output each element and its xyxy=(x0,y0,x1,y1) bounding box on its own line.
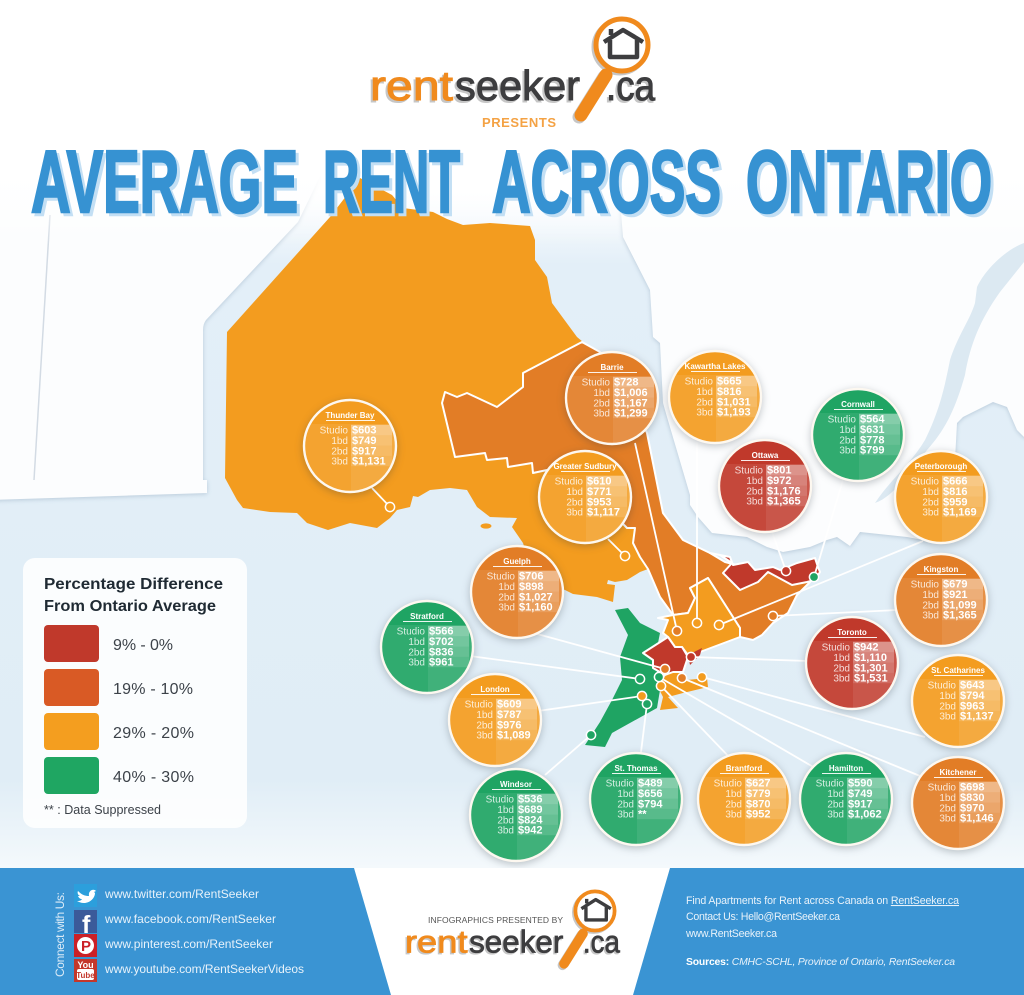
callout: Hamilton: 2bd xyxy=(827,799,844,810)
presents label: PRESENTS xyxy=(482,115,556,130)
callout: Brantford: Brantford xyxy=(726,764,762,773)
callout: Kitchener: $1,146 xyxy=(960,813,994,825)
icon: facebook: f xyxy=(82,911,91,939)
callout: Thunder Bay: Thunder Bay xyxy=(326,411,375,420)
callout: Barrie: 1bd xyxy=(593,388,610,399)
callout: Ottawa: 1bd xyxy=(746,476,763,487)
callout: Peterborough xyxy=(714,451,988,630)
callout: London: $1,089 xyxy=(497,730,531,742)
callout: St. Catharines: 2bd xyxy=(939,701,956,712)
contact text: Sources: CMHC-SCHL, Province of Ontario, RentSeeker.ca xyxy=(686,957,955,968)
callout: Brantford: $870 xyxy=(746,798,770,810)
callout: St. Thomas: 3bd xyxy=(617,810,634,821)
callout: Kingston: $1,099 xyxy=(943,599,977,611)
legend note: ** : Data Suppressed xyxy=(44,803,161,817)
callout: Kitchener: $830 xyxy=(960,792,984,804)
callout: Toronto: 2bd xyxy=(833,663,850,674)
callout: Ottawa: 3bd xyxy=(746,497,763,508)
callout: Kingston: 3bd xyxy=(922,611,939,622)
legend item: 9-0 xyxy=(44,625,173,662)
callout: Cornwall xyxy=(809,389,905,582)
callout: Kawartha Lakes: Kawartha Lakes xyxy=(685,362,746,371)
callout: St. Catharines: 3bd xyxy=(939,712,956,723)
callout: Stratford: $961 xyxy=(429,657,453,669)
callout: Hamilton: $1,062 xyxy=(848,809,882,821)
region: northern Ontario xyxy=(225,178,648,602)
footer: right panel xyxy=(633,868,1024,995)
callout: Hamilton: 1bd xyxy=(827,789,844,800)
callout: Kawartha Lakes: Studio xyxy=(685,377,713,388)
callout: Greater Sudbury: $610 xyxy=(587,476,611,488)
callout: Guelph: $706 xyxy=(519,571,543,583)
legend item: 29-20 xyxy=(44,713,194,750)
icon: pinterest: P xyxy=(81,938,91,955)
title: AVERAGE xyxy=(31,132,298,231)
callout: St. Thomas: $489 xyxy=(638,778,662,790)
title: RENT xyxy=(323,132,460,231)
callout: Kawartha Lakes xyxy=(669,351,762,628)
callout: Hamilton xyxy=(654,672,893,847)
callout: Cornwall: $778 xyxy=(860,434,884,446)
callout: Cornwall: 2bd xyxy=(839,435,856,446)
logo: top RentSeeker xyxy=(370,19,656,115)
callout: Guelph: $1,027 xyxy=(519,591,553,603)
callout: Thunder Bay: 1bd xyxy=(331,436,348,447)
callout: London xyxy=(449,674,647,768)
callout: St. Catharines: 1bd xyxy=(939,691,956,702)
logo: top RentSeeker: .ca xyxy=(606,62,656,109)
callout: Windsor xyxy=(470,730,596,863)
callout: Hamilton: $590 xyxy=(848,778,872,790)
callout: Greater Sudbury: $1,117 xyxy=(587,507,620,519)
legend panel xyxy=(23,558,247,828)
callout: St. Thomas: $794 xyxy=(638,798,663,810)
map: surrounding land xyxy=(0,0,1024,552)
legend item: 40-30 xyxy=(44,757,194,794)
callout: Greater Sudbury: 3bd xyxy=(566,508,583,519)
callout: Kawartha Lakes: 1bd xyxy=(696,387,713,398)
callout: Barrie: 3bd xyxy=(593,409,610,420)
callout: Cornwall: 3bd xyxy=(839,446,856,457)
callout: Thunder Bay xyxy=(304,400,397,512)
title xyxy=(31,132,992,231)
callout: Toronto: 1bd xyxy=(833,653,850,664)
callout: Guelph: 2bd xyxy=(498,592,515,603)
callout: Barrie: Studio xyxy=(582,378,610,389)
callout: London: 1bd xyxy=(476,710,493,721)
callout: Kingston: 2bd xyxy=(922,600,939,611)
callout: Stratford: $702 xyxy=(429,636,453,648)
callout: Hamilton: $917 xyxy=(848,798,872,810)
callout: Toronto: $1,301 xyxy=(854,662,888,674)
region: north-central orange xyxy=(442,342,815,640)
map: river xyxy=(875,243,1024,503)
callout: Windsor: 3bd xyxy=(497,826,514,837)
legend item: 19-10: 19% - 10% xyxy=(113,681,193,698)
callout: Hamilton: Hamilton xyxy=(829,764,863,773)
callout: London: $976 xyxy=(497,719,521,731)
legend item: 19-10 xyxy=(44,669,193,706)
callout: Guelph: 1bd xyxy=(498,582,515,593)
callout: Thunder Bay: $749 xyxy=(352,435,376,447)
legend item: 29-20: 29% - 20% xyxy=(113,725,194,742)
callout: Toronto: $1,110 xyxy=(854,652,887,664)
callout: Guelph: 3bd xyxy=(498,603,515,614)
callout: Thunder Bay: $603 xyxy=(352,425,376,437)
callout: St. Catharines: $1,137 xyxy=(960,711,994,723)
callout: Greater Sudbury: Studio xyxy=(555,477,583,488)
footer background xyxy=(0,868,1024,995)
callout: St. Catharines: St. Catharines xyxy=(931,666,985,675)
callout: Windsor: $689 xyxy=(518,804,542,816)
callout: Kawartha Lakes: $1,193 xyxy=(717,407,751,419)
callout: Peterborough: 2bd xyxy=(922,497,939,508)
callout: Barrie xyxy=(566,352,682,636)
callout: Peterborough: $1,169 xyxy=(943,507,977,519)
callout: Peterborough: $816 xyxy=(943,486,967,498)
callout: Windsor: 1bd xyxy=(497,805,514,816)
callout: London: $787 xyxy=(497,709,521,721)
map: Ontario regions xyxy=(225,178,820,747)
callout: Ottawa: $1,365 xyxy=(767,496,801,508)
icon: facebook xyxy=(74,910,97,939)
callout: St. Thomas: Studio xyxy=(606,779,634,790)
callout: Brantford: $779 xyxy=(746,788,770,800)
callout: Kitchener: 3bd xyxy=(939,814,956,825)
callout: Cornwall: Studio xyxy=(828,415,856,426)
callout: Toronto: $942 xyxy=(854,642,878,654)
icon: pinterest xyxy=(74,934,97,957)
callout: Windsor: Studio xyxy=(486,795,514,806)
callout: Greater Sudbury: $953 xyxy=(587,496,611,508)
social links: www.youtube.com/RentSeekerVideos xyxy=(104,962,304,976)
footer logo: seeker xyxy=(469,923,564,959)
region: Toronto shore xyxy=(688,648,702,665)
callout: Ottawa: Ottawa xyxy=(752,451,779,460)
callout: Stratford: $836 xyxy=(429,646,453,658)
callout: St. Thomas: 2bd xyxy=(617,799,634,810)
callout: Ottawa: $1,176 xyxy=(767,485,801,497)
callout: Hamilton: 3bd xyxy=(827,810,844,821)
callout: Kingston: Kingston xyxy=(924,565,958,574)
callout: Kawartha Lakes: 2bd xyxy=(696,397,713,408)
callout: Kitchener: 2bd xyxy=(939,803,956,814)
callout: Kitchener: Studio xyxy=(928,783,956,794)
callout: Guelph xyxy=(471,546,670,674)
callout: Brantford: Studio xyxy=(714,779,742,790)
callout: Kitchener: 1bd xyxy=(939,793,956,804)
callout: Windsor: $942 xyxy=(518,825,542,837)
callout: Stratford: 3bd xyxy=(408,658,425,669)
island xyxy=(480,523,492,529)
social links: www.twitter.com/RentSeeker xyxy=(104,887,259,901)
callout: Windsor: 2bd xyxy=(497,815,514,826)
legend item: 40-30: 40% - 30% xyxy=(113,769,194,786)
callout: Peterborough: 1bd xyxy=(922,487,939,498)
callout: Greater Sudbury xyxy=(539,451,632,561)
callout: Brantford: 3bd xyxy=(725,810,742,821)
legend heading: From Ontario Average xyxy=(44,598,216,615)
callout: Brantford: $952 xyxy=(746,809,770,821)
callout: London: $609 xyxy=(497,699,521,711)
callout: Stratford: Stratford xyxy=(410,612,444,621)
callout: Hamilton: $749 xyxy=(848,788,872,800)
callout: Ottawa xyxy=(719,440,812,576)
callout: Kingston xyxy=(768,554,988,648)
callout: Stratford: $566 xyxy=(429,626,453,638)
callout: Thunder Bay: Studio xyxy=(320,426,348,437)
callout: Brantford: $627 xyxy=(746,778,770,790)
callout: Cornwall: 1bd xyxy=(839,425,856,436)
callout: Peterborough: Studio xyxy=(911,477,939,488)
callout: Ottawa: $801 xyxy=(767,465,791,477)
callout: Barrie: $1,167 xyxy=(614,397,648,409)
footer: left panel xyxy=(0,868,391,995)
logo: top RentSeeker: seeker xyxy=(455,62,580,109)
callout: Kawartha Lakes: $665 xyxy=(717,376,741,388)
callout: Kawartha Lakes: $816 xyxy=(717,386,741,398)
callout: Cornwall: Cornwall xyxy=(841,400,875,409)
callout: Kitchener xyxy=(677,673,1005,851)
social links: www.pinterest.com/RentSeeker xyxy=(104,937,273,951)
callout: Hamilton: Studio xyxy=(816,779,844,790)
callout: Barrie: $728 xyxy=(614,377,638,389)
icon: youtube: You xyxy=(77,960,94,970)
callout: Brantford: 2bd xyxy=(725,799,742,810)
callout: Toronto: Toronto xyxy=(837,628,867,637)
legend item: 9-0: 9% - 0% xyxy=(113,637,173,654)
callout: Windsor: $536 xyxy=(518,794,542,806)
callout: Cornwall: $799 xyxy=(860,445,884,457)
region: central yellow xyxy=(658,578,740,658)
callout: Kawartha Lakes: 3bd xyxy=(696,408,713,419)
footer logo: rent xyxy=(405,923,468,959)
callout: Kingston: $1,365 xyxy=(943,610,977,622)
callout: St. Thomas: St. Thomas xyxy=(614,764,658,773)
callout: Kingston: Studio xyxy=(911,580,939,591)
icon: youtube xyxy=(74,959,97,982)
region: Ottawa red xyxy=(710,553,820,590)
callout: St. Catharines: $643 xyxy=(960,680,984,692)
logo: top RentSeeker: rent xyxy=(370,62,453,109)
callout: Greater Sudbury: Greater Sudbury xyxy=(553,462,617,471)
presented-by label: INFOGRAPHICS PRESENTED BY xyxy=(428,915,563,925)
callout: London: 2bd xyxy=(476,720,493,731)
callout: Kingston: $679 xyxy=(943,579,967,591)
callout: Toronto: $1,531 xyxy=(854,673,888,685)
callout: Peterborough: 3bd xyxy=(922,508,939,519)
callout: Toronto: 3bd xyxy=(833,674,850,685)
callout: Kitchener: $698 xyxy=(960,782,984,794)
callout: Barrie: Barrie xyxy=(600,363,624,372)
callout: Brantford xyxy=(656,681,791,847)
callout: Thunder Bay: $917 xyxy=(352,445,376,457)
callout: London: London xyxy=(480,685,510,694)
callout: Thunder Bay: $1,131 xyxy=(352,456,386,468)
callout: St. Thomas: ** xyxy=(638,809,647,821)
callout: St. Catharines: Studio xyxy=(928,681,956,692)
callout: Toronto: Studio xyxy=(822,643,850,654)
callout: St. Thomas: 1bd xyxy=(617,789,634,800)
callout: Stratford: Studio xyxy=(397,627,425,638)
callout: St. Thomas xyxy=(590,699,683,847)
title: ACROSS xyxy=(492,132,721,231)
callout: London: 3bd xyxy=(476,731,493,742)
callout: Barrie: $1,006 xyxy=(614,387,648,399)
callout: Stratford: 2bd xyxy=(408,647,425,658)
callout: Toronto xyxy=(686,617,899,711)
social links xyxy=(104,887,304,976)
callout: Greater Sudbury: $771 xyxy=(587,486,611,498)
callout: Guelph: Studio xyxy=(487,572,515,583)
callout: Windsor: $824 xyxy=(518,814,543,826)
social links: www.facebook.com/RentSeeker xyxy=(104,912,276,926)
callout: Cornwall: $631 xyxy=(860,424,884,436)
footer logo: .ca xyxy=(583,923,620,959)
callout: Greater Sudbury: 2bd xyxy=(566,497,583,508)
callout: Thunder Bay: 2bd xyxy=(331,446,348,457)
icon: twitter xyxy=(74,884,97,907)
callout: Peterborough: $959 xyxy=(943,496,967,508)
callout: Guelph: $1,160 xyxy=(519,602,553,614)
callout: Cornwall: $564 xyxy=(860,414,885,426)
callout: St. Catharines xyxy=(697,655,1005,749)
callout: Ottawa: 2bd xyxy=(746,486,763,497)
callout: Greater Sudbury: 1bd xyxy=(566,487,583,498)
icon: youtube: Tube xyxy=(76,971,95,980)
callout: Ottawa: Studio xyxy=(735,466,763,477)
callout: London: Studio xyxy=(465,700,493,711)
region: south-west green xyxy=(585,608,660,747)
contact text: Find Apartments for Rent across Canada on RentSeeker.ca xyxy=(686,895,959,907)
callout: Kitchener: $970 xyxy=(960,802,984,814)
contact text xyxy=(685,895,959,968)
callout: Guelph: Guelph xyxy=(503,557,531,566)
callout: Windsor: Windsor xyxy=(500,780,532,789)
callout: Barrie: 2bd xyxy=(593,398,610,409)
callout: Guelph: $898 xyxy=(519,581,543,593)
callout: Kawartha Lakes: $1,031 xyxy=(717,396,751,408)
callout: Stratford xyxy=(381,601,645,695)
province boundary line xyxy=(34,215,50,480)
connect label: Connect with Us: xyxy=(53,892,67,977)
callout: St. Thomas: $656 xyxy=(638,788,662,800)
footer logo xyxy=(405,891,620,964)
legend heading xyxy=(44,576,223,615)
header white fade xyxy=(0,0,1024,245)
region: Niagara yellow xyxy=(658,670,708,710)
contact text: Contact Us: Hello@RentSeeker.ca xyxy=(686,911,840,923)
callout: St. Catharines: $794 xyxy=(960,690,985,702)
callout: Peterborough: $666 xyxy=(943,476,967,488)
callout: Ottawa: $972 xyxy=(767,475,791,487)
callout: Kitchener: Kitchener xyxy=(940,768,976,777)
callout: Peterborough: Peterborough xyxy=(915,462,967,471)
callout: St. Catharines: $963 xyxy=(960,700,984,712)
callout: Barrie: $1,299 xyxy=(614,408,648,420)
callout: Kingston: 1bd xyxy=(922,590,939,601)
region: Toronto red xyxy=(643,637,688,675)
callout: Kingston: $921 xyxy=(943,589,967,601)
callout: Stratford: 1bd xyxy=(408,637,425,648)
callout: Brantford: 1bd xyxy=(725,789,742,800)
contact text: www.RentSeeker.ca xyxy=(685,928,777,940)
callout: Thunder Bay: 3bd xyxy=(331,457,348,468)
legend heading: Percentage Difference xyxy=(44,576,223,593)
